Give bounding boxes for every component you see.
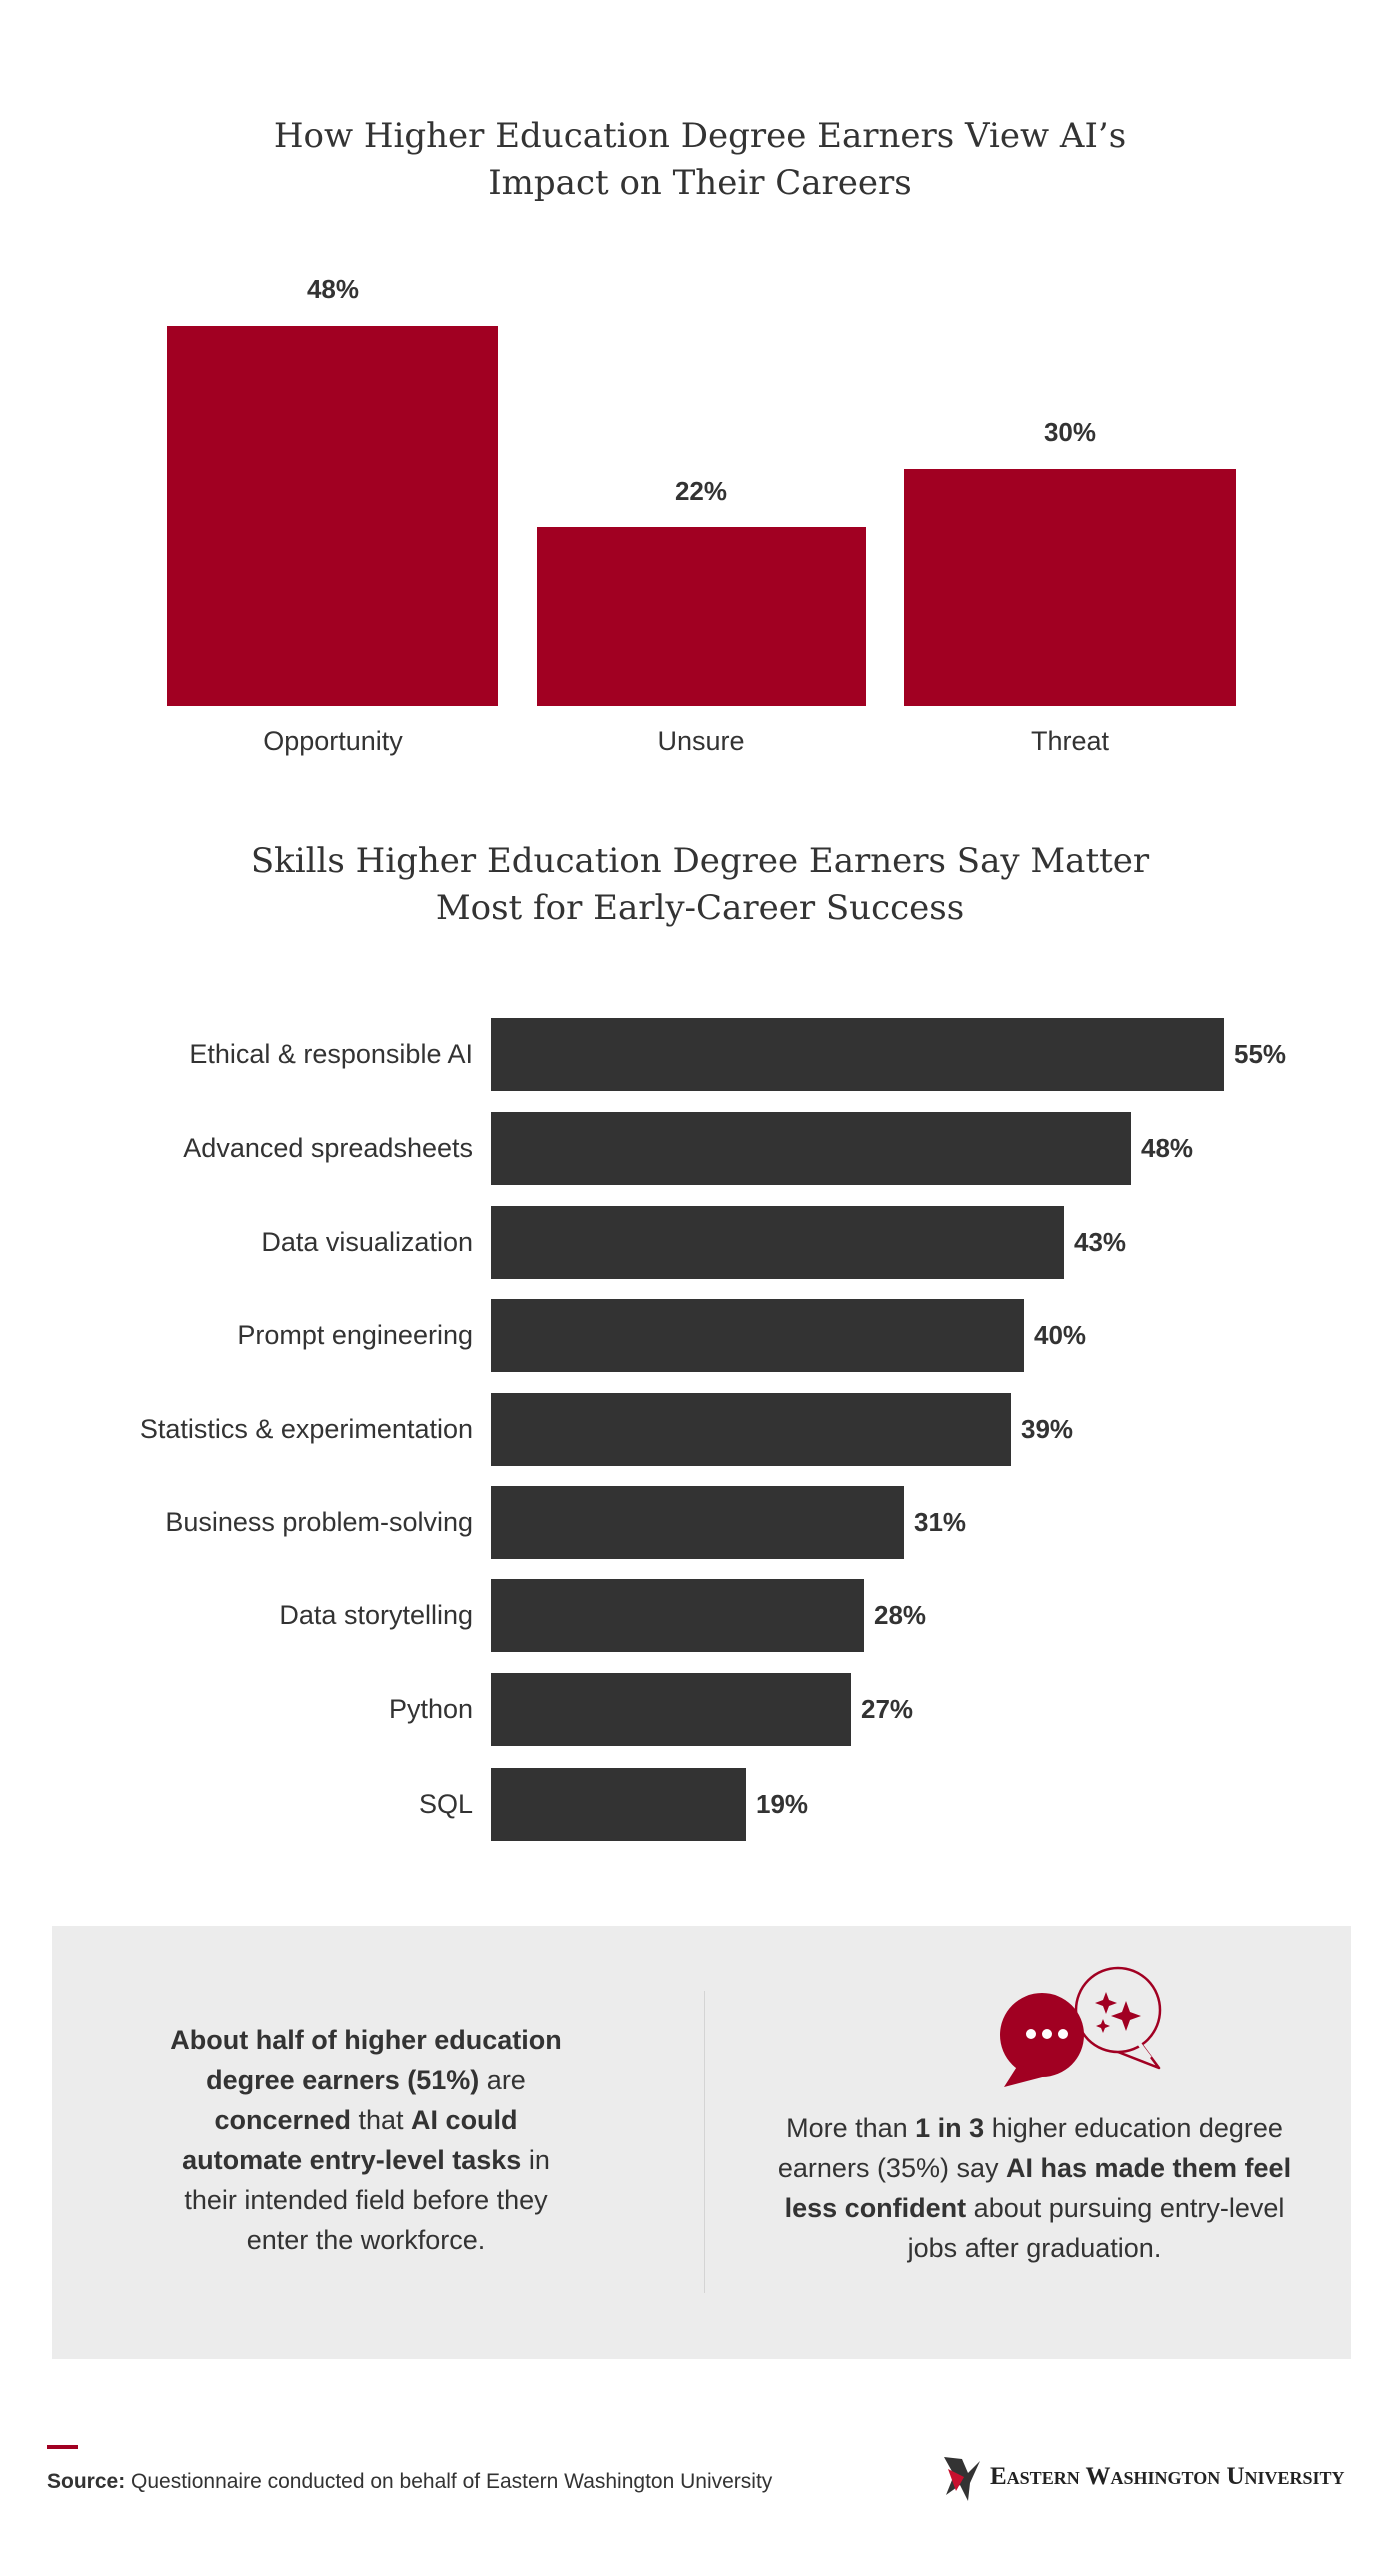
bar chart: skills: Prompt engineering [237, 1320, 473, 1350]
bar chart: skills: Data storytelling [279, 1600, 473, 1630]
logo: EWU [944, 2457, 1345, 2501]
source note: Source: Questionnaire conducted on behalf of Eastern Washington University [47, 2470, 772, 2493]
divider [704, 1991, 705, 2293]
accent dash [47, 2445, 78, 2449]
bar chart: skills: Business problem-solving [165, 1507, 473, 1537]
bar chart: skills: 27% [861, 1694, 913, 1724]
bar chart: skills: 55% [1234, 1039, 1286, 1069]
text: 35% less confident [778, 2113, 1291, 2263]
text: 35% less confident: jobs after graduation. [908, 2233, 1161, 2263]
bar chart: skills: 31% [914, 1507, 966, 1537]
text: 51% concerned: About half of higher education [170, 2025, 562, 2055]
bar chart: skills: Statistics & experimentation [140, 1414, 473, 1444]
logo: EWU: Eastern Washington University [990, 2463, 1345, 2490]
title: chart 1: Impact on Their Careers [488, 163, 912, 203]
text: 51% concerned: automate entry-level tasks in [182, 2145, 550, 2175]
bar chart: AI impact [167, 274, 1236, 756]
bar chart: skills: Python [389, 1694, 473, 1724]
bar chart: skills: 48% [1141, 1133, 1193, 1163]
label: Threat: Threat [1031, 726, 1109, 756]
bar chart: skills: Advanced spreadsheets [183, 1133, 473, 1163]
bar chart: skills: 28% [874, 1600, 926, 1630]
bar: Opportunity [167, 326, 498, 706]
title: chart 1: How Higher Education Degree Earners View AI’s [274, 116, 1126, 156]
bar chart: skills: 43% [1074, 1227, 1126, 1257]
bar chart: skills: 40% [1034, 1320, 1086, 1350]
text: 35% less confident: less confident about pursuing entry-level [785, 2193, 1284, 2223]
title: chart 2 [251, 841, 1150, 928]
panel: key findings [52, 1926, 1351, 2359]
title: chart 2: Skills Higher Education Degree Earners Say Matter [251, 841, 1149, 881]
bar: Threat [904, 469, 1236, 706]
text: 35% less confident: More than 1 in 3 higher education degree [786, 2113, 1283, 2143]
bar: Unsure [537, 527, 866, 706]
text: 35% less confident: earners (35%) say AI has made them feel [778, 2153, 1291, 2183]
label: Unsure: Unsure [657, 726, 745, 756]
text: 51% concerned: concerned that AI could [214, 2105, 518, 2135]
text: 51% concerned: degree earners (51%) are [206, 2065, 526, 2095]
bar chart: skills: Ethical & responsible AI [189, 1039, 473, 1069]
value: 22%: 22% [675, 476, 727, 506]
title: chart 1 [274, 116, 1126, 203]
icon: speech bubbles [1000, 1966, 1162, 2087]
value: 48%: 48% [307, 274, 359, 304]
label: Opportunity: Opportunity [263, 726, 403, 756]
bar chart: skills [140, 1018, 1286, 1841]
bar chart: skills: Data visualization [261, 1227, 473, 1257]
text: 51% concerned: their intended field before they [184, 2185, 548, 2215]
bar chart: skills: 39% [1021, 1414, 1073, 1444]
bar chart: skills: 19% [756, 1789, 808, 1819]
text: 51% concerned [170, 2025, 562, 2255]
title: chart 2: Most for Early-Career Success [436, 888, 964, 928]
text: 51% concerned: enter the workforce. [247, 2225, 485, 2255]
bar chart: skills: SQL [419, 1789, 473, 1819]
value: 30%: 30% [1044, 417, 1096, 447]
